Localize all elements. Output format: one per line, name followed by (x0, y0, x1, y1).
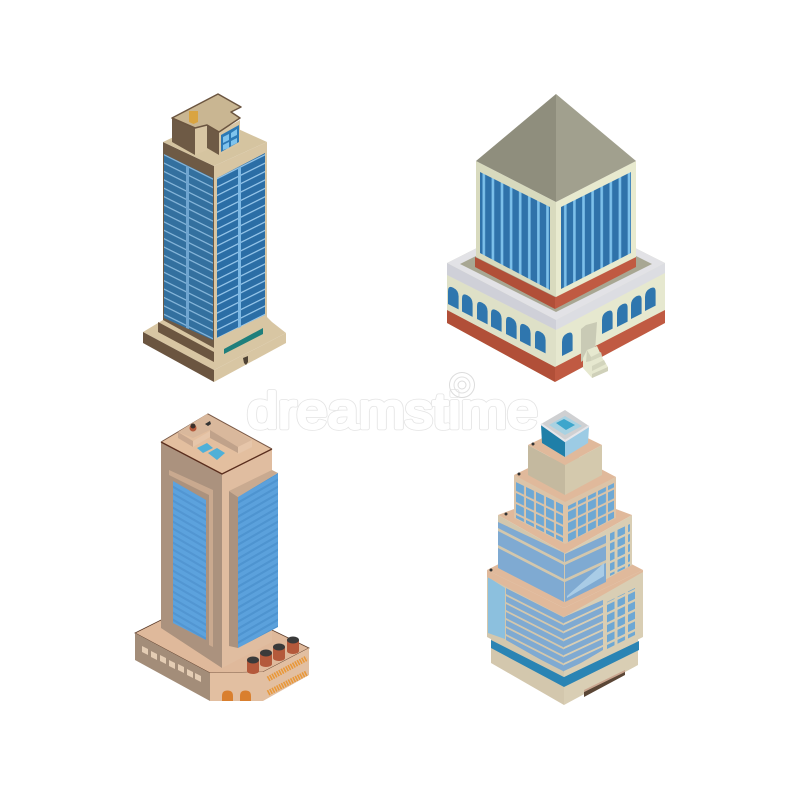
rooftop vents (247, 636, 299, 674)
building: tan tower bottom left (135, 414, 309, 701)
stepped tower lowest tier (487, 550, 643, 677)
tower right face (214, 142, 267, 348)
building: stepped tower bottom right (487, 410, 643, 705)
podium orange grilles (268, 658, 307, 693)
tower roof (163, 118, 267, 166)
tower roof (161, 414, 272, 474)
podium arched doors (222, 690, 251, 701)
podium (135, 620, 309, 701)
watermark: dreamstime (247, 383, 538, 439)
rooftop glass box (541, 410, 589, 457)
hall arched windows (448, 285, 656, 356)
tower plinth (143, 317, 286, 382)
hall upper right face (556, 161, 636, 297)
hall entrance and steps (581, 322, 608, 378)
podium square windows (142, 646, 201, 682)
stepped tower second tier (498, 490, 632, 602)
hall upper left face (476, 161, 556, 297)
building: domed-roof hall top right (447, 94, 665, 382)
tower body (161, 442, 278, 668)
stepped tower ground floor (491, 635, 639, 705)
hall base block (447, 208, 665, 382)
hall red plinth of upper block (475, 257, 636, 309)
stepped tower beige tier (528, 427, 602, 495)
watermark: dreamstime (247, 383, 538, 439)
pyramid roof (476, 94, 636, 202)
stepped tower third tier (514, 450, 616, 544)
rooftop penthouse (172, 94, 241, 155)
tower left face (163, 142, 214, 348)
building: blue tower top left (143, 94, 286, 382)
